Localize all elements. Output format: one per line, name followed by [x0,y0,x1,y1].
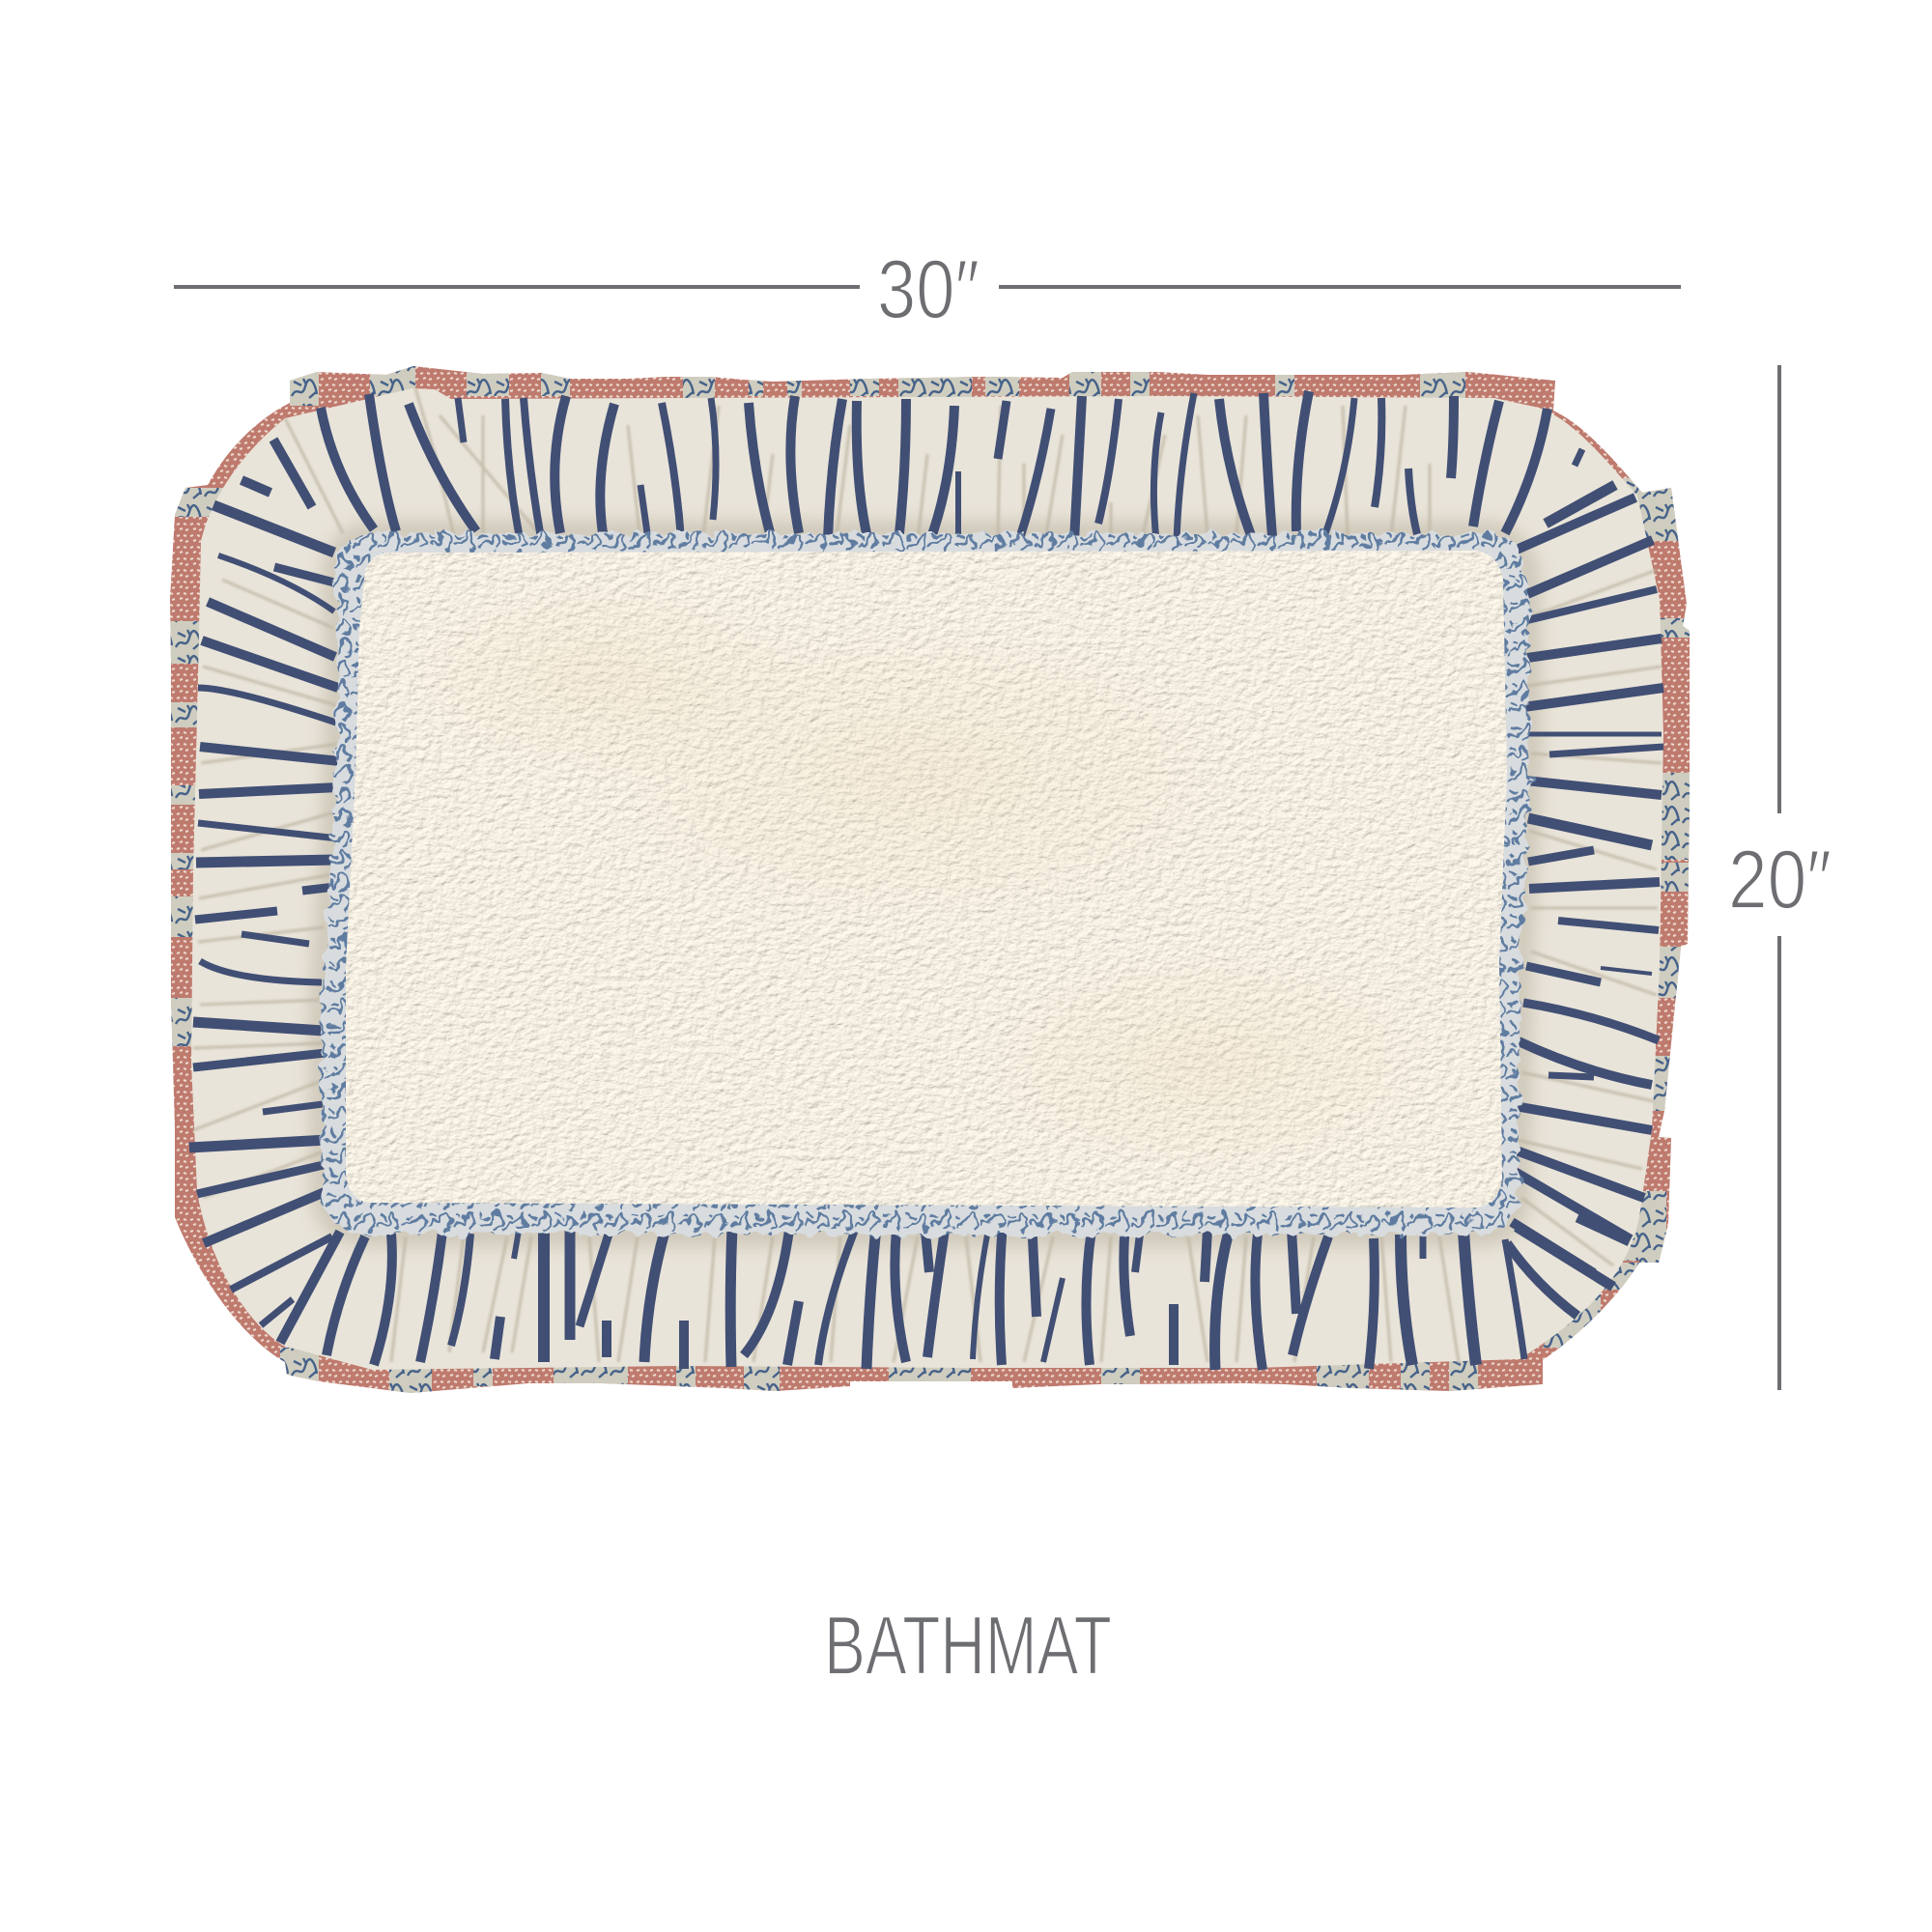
navy stripes: top ruffle [242,391,1582,546]
plush shag centre [346,551,1507,1208]
width dimension line: 30 inches [174,243,1681,336]
caption: BATHMAT: BATHMAT [824,1600,1112,1692]
ruffle pleat folds [193,388,1662,1362]
width dimension line: 30 inches: 30″ [877,243,980,336]
bathmat product [164,357,1700,1401]
outer floral ruffle [164,357,1700,1401]
navy stripes: right ruffle [1510,485,1663,1273]
height dimension line: 20 inches: 20″ [1728,834,1832,926]
navy stripes: left ruffle [189,505,340,1325]
height dimension line: 20 inches [1728,365,1832,1390]
striped cream ruffle base [191,388,1663,1370]
infographic canvas [170,261,1830,1673]
navy stripes: bottom ruffle [280,1217,1630,1370]
inner floral gathered band [321,533,1530,1235]
